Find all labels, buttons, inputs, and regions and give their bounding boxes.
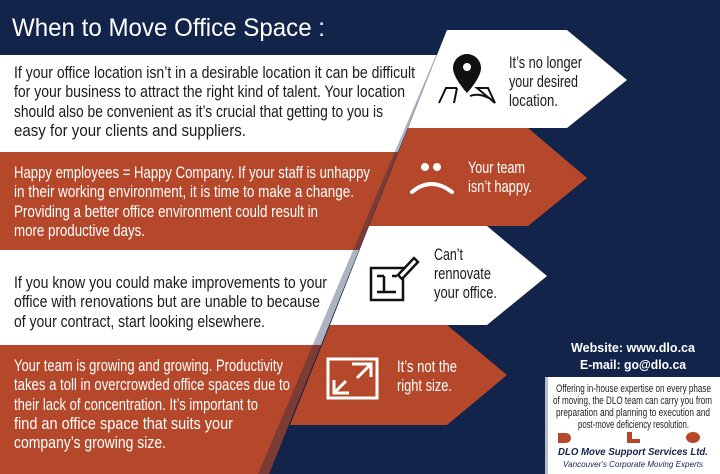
panel: size text xyxy=(0,345,321,474)
contact info: E-mail: go@dlo.ca xyxy=(580,357,687,372)
panel: size text: takes a toll in overcrowded office spaces due to xyxy=(14,376,290,394)
arrow: size: It’s not the xyxy=(397,358,457,376)
arrow: renovation: your office. xyxy=(434,284,497,302)
panel: renovation text: If you know you could make improvements to your xyxy=(14,274,327,292)
panel: renovation text: office with renovations but are unable to because xyxy=(14,293,320,311)
contact info: Website: www.dlo.ca xyxy=(571,340,696,355)
arrow: happiness: Your team xyxy=(468,159,525,177)
panel: size text: company’s growing size. xyxy=(14,434,166,452)
icon: map pin xyxy=(439,54,495,103)
panel: location text: should also be convenient as it’s crucial that getting to you is xyxy=(14,103,383,121)
contact info xyxy=(571,340,696,372)
panel: happiness text xyxy=(0,152,398,250)
title: When to Move Office Space : xyxy=(12,14,325,42)
panel: size text: their lack of concentration. It’s important to xyxy=(14,396,258,414)
icon: blueprint xyxy=(371,258,418,300)
panel: size text: find an office space that suits your xyxy=(14,415,233,433)
arrow: renovation: rennovate xyxy=(434,265,491,283)
arrow: happiness: isn’t happy. xyxy=(468,178,532,196)
panel: renovation text xyxy=(0,250,359,345)
arrow: location xyxy=(408,30,627,128)
arrow: renovation: Can’t xyxy=(434,246,463,264)
panel: location text: easy for your clients and suppliers. xyxy=(14,122,246,140)
arrow: size xyxy=(290,325,507,425)
icon: expand xyxy=(328,359,377,398)
panel: renovation text: of your contract, start looking elsewhere. xyxy=(14,313,265,331)
logo xyxy=(558,432,700,443)
arrow: size: right size. xyxy=(397,377,452,395)
panel: location text: for your business to attract the right kind of talent. Your location xyxy=(14,83,405,101)
panel: happiness text: Happy employees = Happy Company. If your staff is unhappy xyxy=(14,164,371,182)
arrow: renovation xyxy=(330,226,547,325)
diagonal stripe xyxy=(258,55,447,474)
arrow: location: It’s no longer xyxy=(509,54,582,72)
info box: DLO Move Support Services Ltd. xyxy=(558,446,708,458)
info box xyxy=(545,377,720,474)
arrow: location: your desired xyxy=(509,73,578,91)
panel: location text: If your office location isn’t in a desirable location it can be difficult xyxy=(14,64,415,82)
panel: location text xyxy=(0,55,437,152)
info box: Vancouver's Corporate Moving Experts xyxy=(563,460,703,469)
arrow: happiness xyxy=(369,128,587,226)
panel: happiness text: in their working environment, it is time to make a change. xyxy=(14,183,354,201)
panel: happiness text: Providing a better office environment could result in xyxy=(14,203,318,221)
arrow: location: location. xyxy=(509,92,558,110)
icon: sad face xyxy=(412,163,452,192)
panel: size text: Your team is growing and growing. Productivity xyxy=(14,357,284,375)
panel: happiness text: more productive days. xyxy=(14,222,145,240)
